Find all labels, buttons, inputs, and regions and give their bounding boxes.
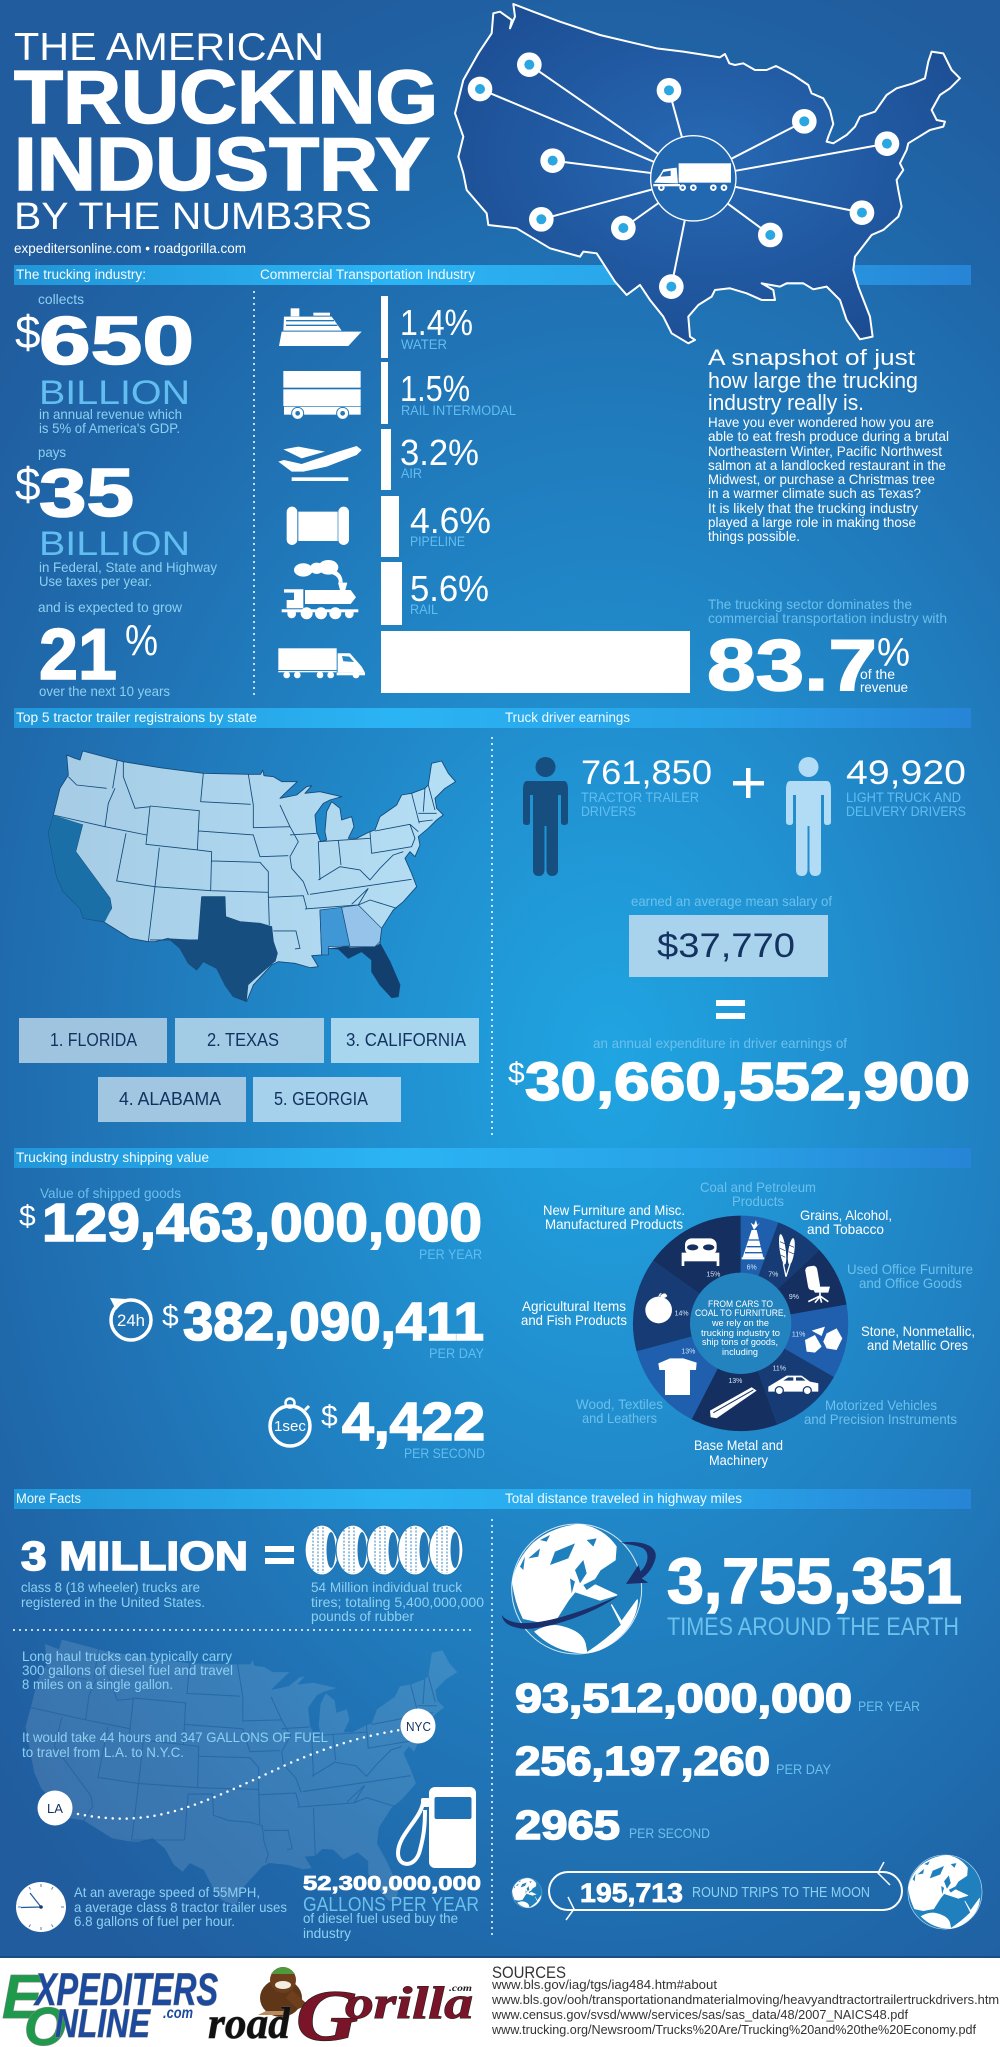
salary box: $37,770: [657, 927, 795, 965]
donut category labels: Machinery: [709, 1452, 768, 1468]
icon: wheat: [778, 1234, 796, 1277]
network nodes: [468, 52, 899, 299]
donut category labels: Stone, Nonmetallic,: [861, 1323, 975, 1339]
panel: trucking industry totals: in Federal, State and Highway: [39, 559, 217, 575]
title block: THE AMERICAN: [14, 26, 324, 69]
text block: snapshot introduction: played a large role in making those: [708, 514, 916, 530]
3 million heading: 3 MILLION: [21, 1533, 248, 1579]
rank: Georgia: [253, 1077, 401, 1122]
segment percentages: 11%: [773, 1366, 786, 1373]
donut category labels: Grains, Alcohol,: [800, 1207, 892, 1223]
bar labels: [400, 302, 516, 617]
icon: steel beam: [710, 1387, 757, 1418]
donut category labels: Motorized Vehicles: [825, 1397, 937, 1413]
expenditure total: an annual expenditure in driver earnings of: [593, 1035, 847, 1051]
title block: BY THE NUMB3RS: [14, 196, 372, 238]
bars: [381, 296, 690, 693]
icon: light driver figure: [786, 757, 831, 876]
rank: Alabama: [98, 1077, 246, 1122]
panel: state registration map: [48, 751, 456, 1002]
rank: California: 3. CALIFORNIA: [346, 1030, 466, 1050]
segment percentages: 11%: [792, 1331, 805, 1338]
diesel fuel statistic: GALLONS PER YEAR: [303, 1894, 479, 1916]
rank: Texas: 2. TEXAS: [207, 1030, 279, 1050]
fact text: LA to NYC: It would take 44 hours and 347 GALLONS OF FUEL: [22, 1729, 328, 1745]
footer: [0, 1956, 1000, 2047]
expenditure total: 30,660,552,900: [525, 1052, 970, 1112]
donut category labels: Coal and Petroleum: [700, 1179, 816, 1195]
text block: snapshot introduction: A snapshot of just: [708, 345, 915, 370]
title block: TRUCKING: [14, 55, 438, 139]
panel: value of shipped goods: 382,090,411: [183, 1292, 484, 1352]
panel: value of shipped goods: $: [321, 1400, 338, 1433]
earth circumference stat: 3,755,351: [667, 1545, 962, 1617]
fact text: truck tires: [311, 1579, 484, 1624]
icon: bed: [682, 1238, 719, 1266]
miles per day: PER DAY: [776, 1761, 832, 1777]
transport icons: [278, 308, 365, 678]
panel: value of shipped goods: PER YEAR: [419, 1246, 482, 1262]
miles per second: PER SECOND: [629, 1825, 710, 1841]
segment percentages: 7%: [768, 1272, 778, 1279]
state: Texas: [168, 897, 277, 1002]
text block: snapshot introduction: able to eat fresh produce during a brutal: [708, 428, 949, 444]
text block: snapshot introduction: how large the trucking: [708, 368, 918, 393]
plus sign: [733, 768, 764, 798]
diesel fuel statistic: industry: [303, 1925, 351, 1941]
earth circumference stat: TIMES AROUND THE EARTH: [667, 1613, 959, 1641]
panel: value of shipped goods: $: [19, 1200, 36, 1233]
section bar: trucking industry: [14, 265, 971, 285]
panel: trucking industry totals: over the next 10 years: [39, 683, 170, 699]
segment percentages: 15%: [706, 1271, 720, 1278]
section bar: facts and distance: More Facts: [16, 1491, 81, 1506]
title block: INDUSTRY: [14, 122, 430, 206]
icon: office chair: [805, 1265, 830, 1303]
segment percentages: 6%: [747, 1265, 757, 1272]
land outline: [48, 751, 456, 1002]
donut centre text: we rely on the: [711, 1318, 769, 1329]
section bar: facts and distance: Total distance traveled in highway miles: [505, 1491, 742, 1506]
round trip loop: 195,713: [580, 1878, 683, 1908]
logo: Expediters Online: E: [2, 1963, 44, 2032]
rank: Florida: 1. FLORIDA: [50, 1030, 137, 1050]
miles per day: 256,197,260: [515, 1738, 770, 1784]
donut category labels: Used Office Furniture: [847, 1261, 973, 1277]
icon: train: [282, 560, 358, 619]
section bar: trucking industry: Commercial Transportation Industry: [260, 267, 475, 282]
donut centre text: trucking industry to: [701, 1328, 780, 1339]
marker: LA: [38, 1790, 72, 1826]
miles per second: [515, 1802, 710, 1848]
panel: total distance: [502, 1524, 982, 1929]
panel: trucking industry totals: BILLION: [39, 374, 190, 412]
round trip loop: [549, 1862, 902, 1920]
icon: apple: [645, 1293, 672, 1323]
driver count: tractor trailer: 761,850: [581, 754, 712, 792]
donut category labels: Products: [732, 1193, 784, 1209]
donut segments: [633, 1216, 848, 1431]
diesel fuel statistic: of diesel fuel used buy the: [303, 1910, 458, 1926]
sources list: SOURCES: [492, 1963, 566, 1982]
state: California: [48, 815, 112, 922]
panel: trucking industry totals: is 5% of America's GDP.: [39, 420, 180, 436]
callout: 83.7% of revenue: %: [877, 631, 910, 675]
icon: rail container: [283, 371, 361, 419]
sources list: www.bls.gov/iag/tgs/iag484.htm#about: [491, 1977, 717, 1992]
bar labels: PIPELINE: [410, 534, 465, 549]
driver count: light truck: LIGHT TRUCK AND: [846, 790, 961, 805]
panel: trucking industry totals: pays: [38, 444, 66, 460]
panel: value of shipped goods: PER DAY: [429, 1345, 485, 1361]
donut category labels: Manufactured Products: [545, 1216, 683, 1232]
donut centre text: [695, 1299, 786, 1358]
panel: value of shipped goods: $: [162, 1300, 179, 1333]
marker: NYC: [400, 1708, 436, 1744]
sources list: www.census.gov/svsd/www/services/sas/sas_data/48/2007_NAICS48.pdf: [491, 2007, 908, 2022]
text block: snapshot introduction: It is likely that the trucking industry: [708, 500, 918, 516]
callout: 83.7% of revenue: 83.7: [707, 626, 877, 706]
panel: truck driver earnings: [508, 754, 970, 1112]
callout: 83.7% of revenue: The trucking sector dominates the: [708, 596, 912, 612]
donut category labels: Base Metal and: [694, 1437, 783, 1453]
donut centre text: COAL TO FURNITURE,: [695, 1308, 786, 1319]
donut centre text: ship tons of goods,: [702, 1337, 778, 1348]
bar labels: 1.5%: [400, 368, 470, 409]
donut category labels: and Precision Instruments: [804, 1411, 957, 1427]
icon: rocks: [805, 1327, 842, 1353]
fact text: fuel capacity: 300 gallons of diesel fuel and travel: [22, 1662, 233, 1678]
equals sign: [716, 1000, 745, 1019]
section bar: trucking industry: The trucking industry:: [16, 267, 146, 282]
central hub with truck: [651, 136, 736, 221]
panel: more facts: [16, 1525, 484, 1941]
logo: Expediters Online: NLINE: [55, 2002, 151, 2046]
icon: pipeline: [287, 507, 349, 545]
text block: snapshot introduction: Have you ever wondered how you are: [708, 414, 934, 430]
title block: expeditersonline.com • roadgorilla.com: [14, 240, 246, 256]
driver count: tractor trailer: DRIVERS: [581, 804, 636, 819]
text block: snapshot introduction: things possible.: [708, 528, 800, 544]
icon: gorilla mascot: [258, 1967, 308, 2017]
segment percentages: 9%: [789, 1294, 799, 1301]
icon: stopwatch: 1sec: [274, 1418, 307, 1435]
text block: snapshot introduction: Northeastern Winter, Pacific Northwest: [708, 443, 942, 459]
section bar: facts and distance: [14, 1489, 971, 1509]
text block: snapshot introduction: Midwest, or purchase a Christmas tree: [708, 471, 935, 487]
donut centre text: including: [722, 1347, 758, 1358]
icon: oil rig: [742, 1220, 764, 1259]
fact text: average speed: [74, 1884, 287, 1929]
sources list: [491, 1963, 1000, 2037]
state: Florida: [328, 943, 400, 998]
bar labels: 5.6%: [410, 568, 489, 609]
icon: stopwatch: [270, 1398, 310, 1446]
state: Georgia: [342, 905, 382, 947]
icon: car: [768, 1376, 818, 1395]
state borders: [53, 760, 437, 962]
title block: [14, 26, 438, 256]
callout: 83.7% of revenue: commercial transportation industry with: [708, 610, 947, 626]
icon: ship: [279, 308, 362, 346]
fact text: fuel capacity: Long haul trucks can typically carry: [22, 1648, 232, 1664]
segment icons: [645, 1220, 842, 1418]
section bar: registrations and earnings: Top 5 tractor trailer registraions by state: [16, 710, 257, 725]
panel: trucking industry totals: 35: [39, 455, 134, 531]
fact text: truck tires: 54 Million individual truck: [311, 1579, 463, 1595]
donut category labels: and Tobacco: [807, 1221, 884, 1237]
chart: shipped goods donut: [633, 1216, 848, 1431]
panel: value of shipped goods: 129,463,000,000: [42, 1193, 482, 1253]
icon: tires: [305, 1525, 463, 1575]
diesel fuel statistic: [303, 1873, 481, 1941]
icon: small globe: [512, 1878, 542, 1908]
donut category labels: and Leathers: [582, 1410, 657, 1426]
panel: trucking industry totals: BILLION: [39, 525, 190, 563]
logo: road Gorilla: orilla: [345, 1977, 473, 2028]
round trip loop: ROUND TRIPS TO THE MOON: [692, 1885, 870, 1901]
panel: trucking industry totals: in annual revenue which: [39, 406, 182, 422]
segment percentages: 13%: [681, 1349, 695, 1356]
icon: 24 hour clock: 24h: [117, 1311, 145, 1330]
rank: Texas: [175, 1018, 324, 1063]
logo: road Gorilla: [208, 1967, 473, 2047]
panel: trucking industry totals: $: [15, 458, 41, 510]
sources list: www.bls.gov/ooh/transportationandmaterialmoving/heavyandtractortrailertruckdrivers.html: [491, 1992, 1000, 2007]
bar labels: 1.4%: [400, 302, 473, 343]
segment percentages: 14%: [675, 1311, 689, 1318]
icon: dark driver figure: [523, 757, 568, 876]
map outline: [455, 4, 960, 343]
section bar: shipping value: [14, 1148, 971, 1168]
donut category labels: New Furniture and Misc.: [543, 1202, 685, 1218]
segment percentages: [675, 1265, 805, 1385]
marker: LA: LA: [47, 1802, 64, 1816]
section bar: registrations and earnings: [14, 708, 971, 728]
rank: Georgia: 5. GEORGIA: [274, 1089, 368, 1109]
fact text: truck tires: tires; totaling 5,400,000,000: [311, 1594, 484, 1610]
text block: snapshot introduction: in a warmer climate such as Texas?: [708, 485, 921, 501]
text block: snapshot introduction: industry really is.: [708, 390, 864, 415]
bar labels: WATER: [401, 337, 447, 352]
panel: trucking industry totals: and is expected to grow: [38, 599, 183, 615]
donut category labels: [521, 1179, 975, 1468]
fact text: average speed: At an average speed of 55MPH,: [74, 1884, 260, 1900]
logo: Expediters Online: XPEDITERS: [33, 1964, 218, 2015]
callout: 83.7% of revenue: of the: [860, 667, 895, 682]
section bar: shipping value: Trucking industry shipping value: [16, 1150, 209, 1165]
panel: value of shipped goods: PER SECOND: [404, 1445, 485, 1461]
logo: road Gorilla: .com: [449, 1983, 472, 1993]
icon: t-shirt: [658, 1358, 697, 1395]
donut centre text: FROM CARS TO: [708, 1299, 773, 1310]
panel: trucking industry totals: $: [15, 306, 41, 358]
fact text: average speed: 6.8 gallons of fuel per hour.: [74, 1913, 235, 1929]
fact text: average speed: a average class 8 tractor trailer uses: [74, 1899, 287, 1915]
expenditure total: $: [508, 1057, 525, 1090]
logo: road Gorilla: road: [208, 1999, 291, 2047]
state: Alabama: [320, 907, 350, 955]
panel: trucking industry totals: collects: [38, 291, 84, 307]
logo: Expediters Online: [2, 1963, 218, 2047]
driver count: light truck: [846, 754, 966, 819]
marker: NYC: NYC: [406, 1720, 431, 1734]
panel: commercial transportation bar chart: [278, 296, 690, 693]
expenditure total: [508, 1035, 970, 1112]
fact text: truck tires: pounds of rubber: [311, 1608, 414, 1624]
logo: Expediters Online: .com: [163, 2005, 193, 2022]
panel: trucking industry totals: Use taxes per year.: [39, 573, 152, 589]
icon: semi truck: [278, 648, 365, 678]
route line: [78, 1730, 400, 1819]
segment percentages: 13%: [728, 1378, 742, 1385]
sources list: www.trucking.org/Newsroom/Trucks%20Are/Trucking%20and%20the%20Economy.pdf: [491, 2022, 976, 2037]
fact text: trucks registered: registered in the United States.: [21, 1594, 205, 1610]
driver count: tractor trailer: [581, 754, 712, 819]
faint map background: [26, 1640, 457, 1905]
text block: snapshot introduction: [708, 345, 949, 544]
bar labels: AIR: [401, 466, 422, 481]
diesel fuel statistic: 52,300,000,000: [303, 1873, 481, 1895]
donut category labels: and Metallic Ores: [867, 1337, 968, 1353]
rank: Florida: [19, 1018, 167, 1063]
donut category labels: and Fish Products: [521, 1312, 627, 1328]
icon: airplane: [278, 446, 362, 481]
driver count: tractor trailer: TRACTOR TRAILER: [581, 790, 699, 805]
panel: trucking industry totals: [15, 291, 217, 699]
icon: 24 hour clock: [110, 1298, 151, 1340]
donut category labels: and Office Goods: [859, 1275, 962, 1291]
average salary caption: earned an average mean salary of: [631, 893, 832, 909]
driver count: light truck: DELIVERY DRIVERS: [846, 804, 966, 819]
salary box: [629, 915, 828, 977]
donut category labels: Agricultural Items: [522, 1298, 626, 1314]
panel: trucking industry totals: 21: [39, 615, 117, 695]
driver count: light truck: 49,920: [846, 754, 966, 792]
fact text: trucks registered: class 8 (18 wheeler) trucks are: [21, 1579, 200, 1595]
icon: clock: [16, 1882, 66, 1932]
rank: California: [331, 1018, 479, 1063]
panel: value of shipped goods: 4,422: [342, 1392, 485, 1452]
panel: trucking industry totals: %: [125, 616, 158, 665]
fact text: LA to NYC: to travel from L.A. to N.Y.C.: [22, 1744, 184, 1760]
miles per year: 93,512,000,000: [515, 1675, 852, 1721]
callout: 83.7% of revenue: [707, 596, 947, 706]
fact text: LA to NYC: [22, 1729, 328, 1760]
hero: United States network map: [455, 4, 960, 343]
panel: trucking industry totals: 650: [39, 303, 194, 379]
fact text: fuel capacity: 8 miles on a single gallon.: [22, 1676, 173, 1692]
ranking boxes: [19, 1018, 479, 1122]
icon: globe with orbit arrow: [502, 1524, 656, 1654]
fact text: fuel capacity: [22, 1648, 233, 1692]
panel: value of shipped goods: [19, 1185, 485, 1461]
text block: snapshot introduction: salmon at a landlocked restaurant in the: [708, 457, 946, 473]
bar labels: RAIL INTERMODAL: [401, 403, 516, 418]
bar labels: RAIL: [410, 602, 438, 617]
icon: large globe: [908, 1855, 982, 1929]
fact text: trucks registered: [21, 1579, 205, 1610]
miles per second: 2965: [515, 1802, 620, 1848]
bar labels: 4.6%: [410, 500, 491, 541]
icon: fuel pump: [398, 1787, 476, 1868]
connecting lines: [480, 65, 887, 287]
donut category labels: Wood, Textiles: [576, 1396, 663, 1412]
panel: value of shipped goods: Value of shipped goods: [40, 1185, 181, 1201]
rank: Alabama: 4. ALABAMA: [119, 1089, 221, 1109]
bar labels: 3.2%: [400, 432, 479, 473]
callout: 83.7% of revenue: revenue: [860, 680, 908, 695]
section bar: registrations and earnings: Truck driver earnings: [505, 710, 630, 725]
donut centre: [690, 1273, 791, 1374]
miles per year: PER YEAR: [858, 1698, 920, 1714]
